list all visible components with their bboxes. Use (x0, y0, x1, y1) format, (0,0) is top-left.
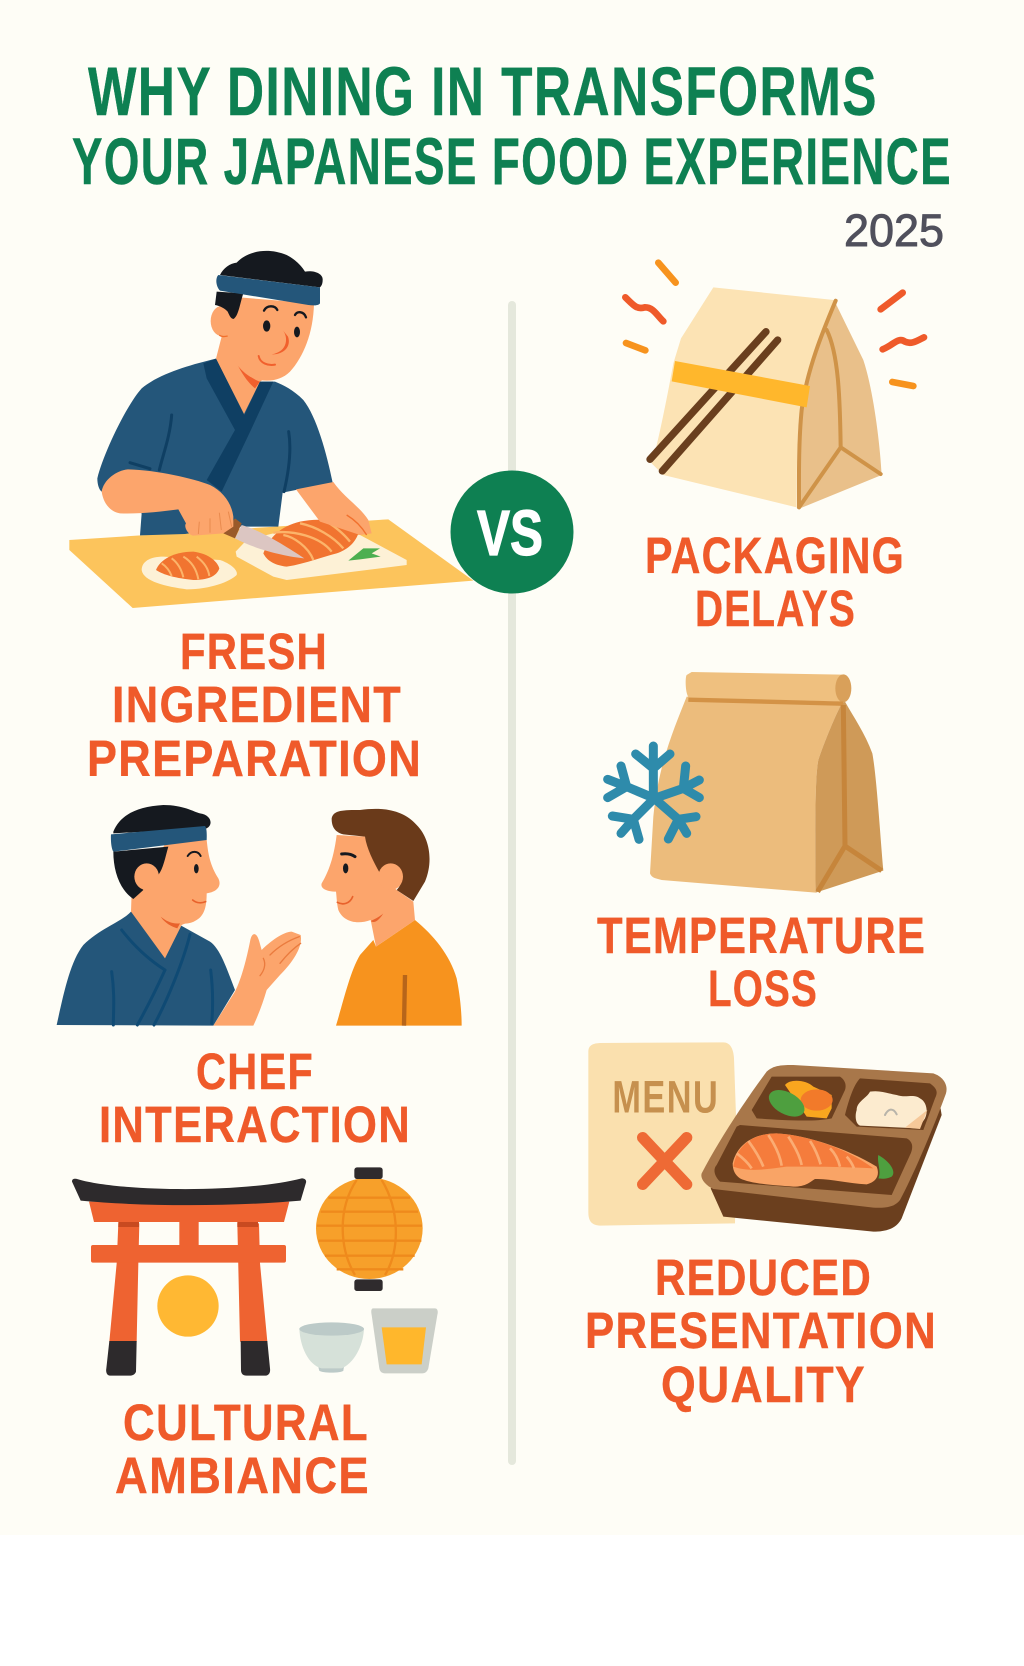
panel: reduced presentation quality (585, 1042, 947, 1413)
label: fresh ingredient preparation: FRESH (180, 623, 328, 680)
icon: crossed menu and bento tray: MENU (612, 1071, 719, 1122)
VS badge: VS (477, 497, 543, 569)
icon: crossed menu and bento tray (588, 1042, 947, 1232)
icon: chef slicing salmon (69, 251, 473, 608)
label: reduced presentation quality: QUALITY (661, 1356, 866, 1413)
label: packaging delays: PACKAGING (645, 527, 905, 584)
label: reduced presentation quality: REDUCED (655, 1249, 872, 1306)
label: cultural ambiance (115, 1394, 370, 1504)
label: chef interaction: INTERACTION (99, 1096, 411, 1153)
icon: torii gate, lantern and drinks (72, 1167, 438, 1376)
year: 2025 (844, 205, 944, 256)
label: fresh ingredient preparation: PREPARATION (87, 730, 422, 787)
label: temperature loss (597, 907, 926, 1017)
panel: cultural ambiance (72, 1167, 438, 1504)
icon: paper bag with chopsticks and motion marks (625, 263, 924, 508)
panel: fresh ingredient preparation (69, 251, 473, 787)
VS badge (450, 470, 574, 594)
label: packaging delays: DELAYS (695, 580, 856, 637)
label: reduced presentation quality: PRESENTATION (585, 1302, 937, 1359)
label: cultural ambiance: AMBIANCE (115, 1447, 370, 1504)
panel: chef interaction (57, 805, 462, 1153)
label: temperature loss: TEMPERATURE (597, 907, 926, 964)
label: chef interaction (99, 1043, 411, 1153)
label: fresh ingredient preparation: INGREDIENT (112, 676, 402, 733)
title (72, 53, 952, 198)
panel: packaging delays (625, 263, 924, 637)
label: chef interaction: CHEF (196, 1043, 314, 1100)
icon: chef talking with customer (57, 805, 462, 1026)
label: cultural ambiance: CULTURAL (123, 1394, 369, 1451)
panel: temperature loss (597, 672, 926, 1017)
icon: kraft bag with snowflake (608, 672, 883, 893)
label: temperature loss: LOSS (708, 960, 818, 1017)
label: fresh ingredient preparation (87, 623, 422, 787)
label: reduced presentation quality (585, 1249, 937, 1413)
label: packaging delays (645, 527, 905, 637)
